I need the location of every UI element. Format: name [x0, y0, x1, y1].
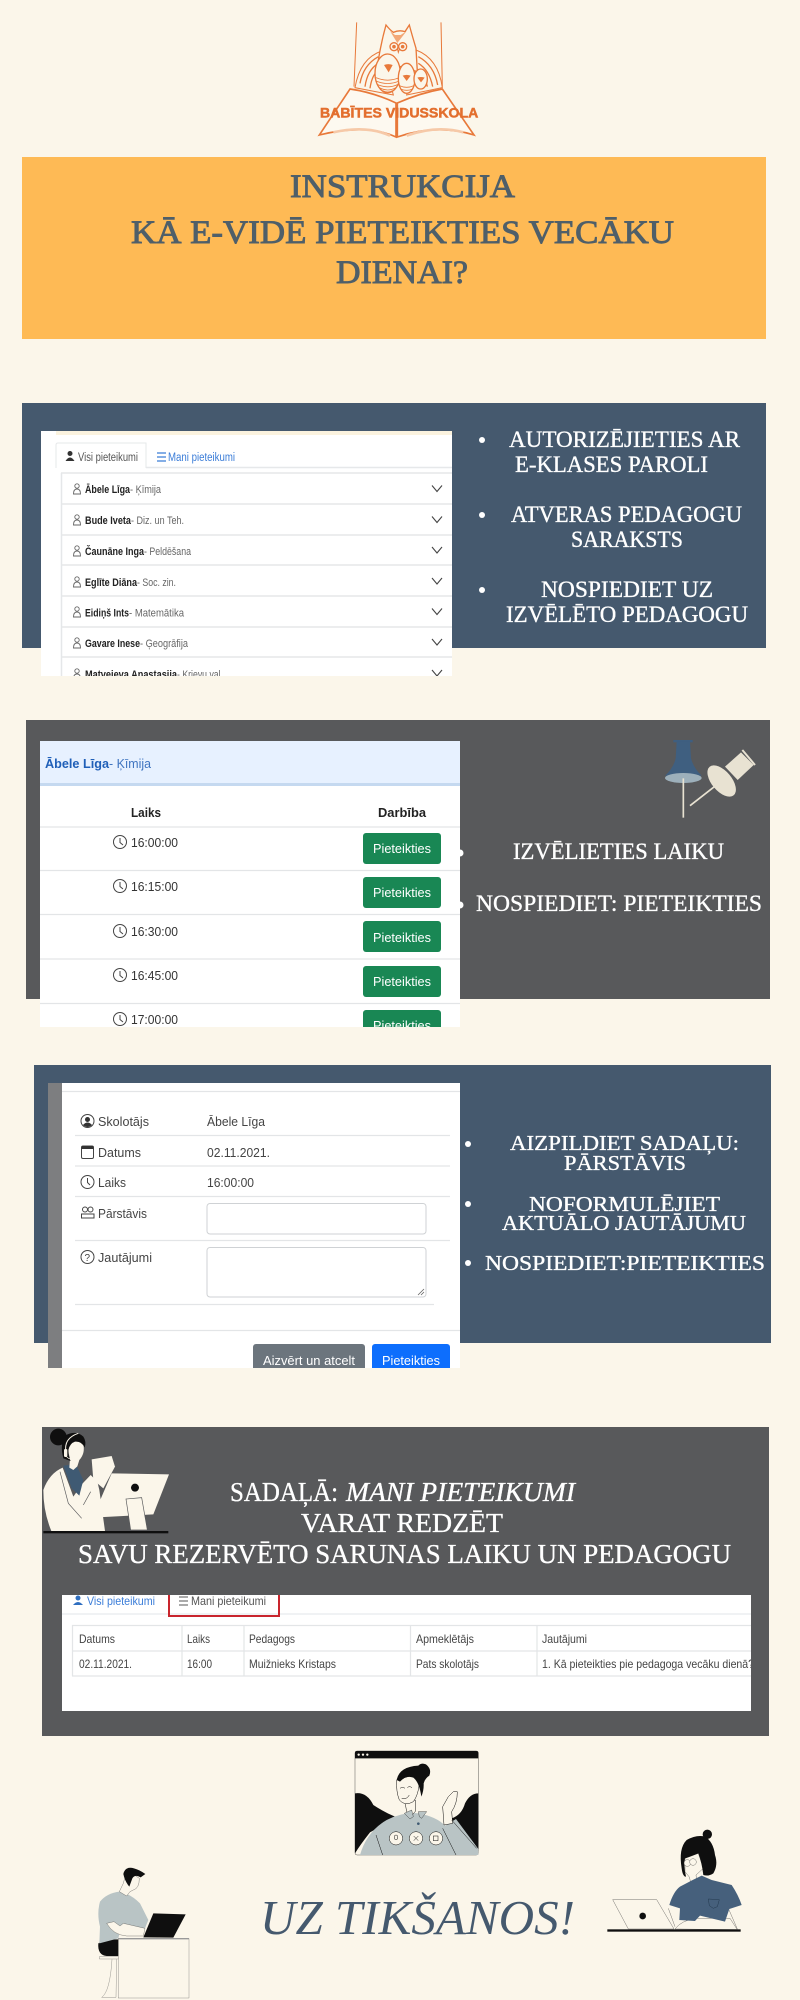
screenshot: booking form: 16:00:00	[207, 1175, 254, 1190]
screenshot: my bookings table: Mani pieteikumi	[191, 1594, 266, 1608]
panel: step 4 background	[42, 1427, 769, 1736]
screenshot: time slots	[40, 741, 460, 1041]
screenshot: teacher list: - Peldēšana	[144, 546, 192, 558]
logo: Babītes vidusskola owls on a book	[319, 22, 478, 137]
screenshot: time slots: Pieteikties	[373, 885, 431, 900]
screenshot: my bookings table: 16:00	[187, 1657, 212, 1671]
screenshot: time slots: 16:00:00	[131, 835, 178, 850]
screenshot: teacher list: Bude Iveta	[85, 515, 132, 527]
screenshot: time slots: Laiks	[131, 805, 161, 820]
screenshot: time slots: Pieteikties	[373, 1018, 431, 1033]
illustration: video call window	[355, 1751, 478, 1855]
text block: step 1 instructions	[479, 427, 748, 627]
text block: step 2 instructions: IZVĒLIETIES LAIKU	[513, 839, 724, 864]
text block: step 3 instructions: AKTUĀLO JAUTĀJUMU	[502, 1211, 746, 1235]
title panel: KĀ E-VIDĒ PIETEIKTIES VECĀKU	[131, 215, 674, 251]
screenshot: teacher list: - Matemātika	[129, 608, 185, 620]
text block: step 1 instructions: SARAKSTS	[571, 527, 683, 552]
text block: step 3 instructions: NOFORMULĒJIET	[529, 1192, 720, 1216]
screenshot: my bookings table: Muižnieks Kristaps	[249, 1657, 336, 1671]
screenshot: my bookings table: Pedagogs	[249, 1632, 295, 1646]
screenshot: teacher list: Gavare Inese	[85, 638, 140, 650]
text block: step 2 instructions	[476, 839, 762, 916]
screenshot: teacher list: - Diz. un Teh.	[131, 515, 184, 527]
screenshot: teacher list: Visi pieteikumi	[78, 452, 138, 464]
text block: step 4 heading: VARAT REDZĒT	[301, 1508, 504, 1538]
screenshot: my bookings table: Laiks	[187, 1632, 210, 1646]
text block: step 1 instructions: E-KLASES PAROLI	[515, 452, 708, 477]
screenshot: booking form: Datums	[98, 1145, 141, 1160]
screenshot: my bookings table: Visi pieteikumi	[87, 1594, 155, 1608]
panel: step 1 background	[22, 403, 766, 648]
screenshot: my bookings table: Apmeklētājs	[416, 1632, 474, 1646]
screenshot: time slots: Ābele Līga	[45, 756, 110, 771]
screenshot: teacher list: Mani pieteikumi	[168, 452, 235, 464]
screenshot: teacher list: Eidiņš Ints	[85, 608, 129, 620]
screenshot: time slots: 16:30:00	[131, 924, 178, 939]
text block: step 1 instructions: IZVĒLĒTO PEDAGOGU	[506, 602, 748, 627]
screenshot: booking form: Aizvērt un atcelt	[263, 1353, 355, 1368]
screenshot: time slots: Pieteikties	[373, 841, 431, 856]
screenshot: my bookings table	[62, 1594, 754, 1711]
screenshot: time slots: - Ķīmija	[109, 756, 152, 771]
illustration: woman with headset at a monitor	[43, 1429, 169, 1533]
panel: step 2 background	[26, 720, 770, 999]
panel: step 3 background	[34, 1065, 771, 1343]
screenshot: time slots: Darbība	[378, 805, 427, 820]
screenshot: time slots: Pieteikties	[373, 930, 431, 945]
screenshot: time slots: Pieteikties	[373, 974, 431, 989]
title panel	[22, 157, 766, 339]
screenshot: booking form	[48, 1083, 460, 1376]
illustration: man at a desk with laptop	[98, 1868, 189, 1998]
text block: step 3 instructions	[465, 1131, 765, 1275]
screenshot: teacher list: Ābele Līga	[85, 484, 131, 496]
text block: step 3 instructions: AIZPILDIET SADAĻU:	[510, 1131, 739, 1155]
text block: step 4 heading: MANI PIETEIKUMI	[345, 1477, 577, 1507]
text block: step 2 instructions: NOSPIEDIET: PIETEIKTIES	[476, 891, 762, 916]
text block: step 3 instructions: NOSPIEDIET:PIETEIKTIES	[485, 1251, 765, 1275]
screenshot: booking form: Pārstāvis	[98, 1206, 147, 1221]
title panel: INSTRUKCIJA	[290, 169, 515, 205]
bullet dots: step 2	[456, 850, 464, 908]
screenshot: teacher list: Eglīte Diāna	[85, 577, 138, 589]
screenshot: time slots: 16:45:00	[131, 968, 178, 983]
screenshot: teacher list: Čaunāne Inga	[85, 545, 145, 558]
text block: step 4 heading: SAVU REZERVĒTO SARUNAS LAIKU UN PEDAGOGU	[78, 1539, 731, 1569]
screenshot: time slots: 17:00:00	[131, 1012, 178, 1027]
screenshot: teacher list	[41, 431, 452, 681]
screenshot: my bookings table: Datums	[79, 1632, 115, 1646]
screenshot: my bookings table: 1. Kā pieteikties pie pedagoga vecāku dienā?	[542, 1657, 754, 1671]
text: closing greeting: UZ TIKŠANOS!	[260, 1890, 575, 1945]
screenshot: teacher list: - Krievu val.	[177, 669, 223, 681]
text block: step 4 heading	[78, 1477, 731, 1569]
screenshot: my bookings table: 02.11.2021.	[79, 1657, 132, 1671]
screenshot: booking form: Ābele Līga	[207, 1114, 266, 1129]
logo: Babītes vidusskola owls on a book: BABĪTES VIDUSSKOLA	[320, 104, 478, 120]
screenshot: booking form: Jautājumi	[98, 1250, 152, 1265]
screenshot: teacher list: - Ķīmija	[130, 484, 162, 496]
illustration: woman working on a laptop	[607, 1830, 742, 1932]
screenshot: booking form: Skolotājs	[98, 1114, 149, 1129]
screenshot: teacher list: Matveieva Anastasija	[85, 669, 178, 681]
title panel: DIENAI?	[336, 255, 468, 291]
text block: step 4 heading: SADAĻĀ:	[230, 1477, 338, 1507]
screenshot: booking form: ?	[84, 1253, 90, 1264]
screenshot: my bookings table: Jautājumi	[542, 1632, 587, 1646]
screenshot: time slots: 16:15:00	[131, 879, 178, 894]
icon: push pins	[665, 740, 755, 818]
text block: step 1 instructions: ATVERAS PEDAGOGU	[511, 502, 742, 527]
screenshot: teacher list: - Soc. zin.	[137, 577, 176, 589]
screenshot: booking form: Laiks	[98, 1175, 126, 1190]
screenshot: booking form: Pieteikties	[382, 1353, 440, 1368]
screenshot: teacher list: - Ģeogrāfija	[140, 638, 189, 650]
text block: step 1 instructions: NOSPIEDIET UZ	[541, 577, 713, 602]
screenshot: my bookings table: Pats skolotājs	[416, 1657, 479, 1671]
text block: step 3 instructions: PĀRSTĀVIS	[564, 1151, 686, 1175]
text block: step 1 instructions: AUTORIZĒJIETIES AR	[509, 427, 741, 452]
screenshot: booking form: 02.11.2021.	[207, 1145, 270, 1160]
